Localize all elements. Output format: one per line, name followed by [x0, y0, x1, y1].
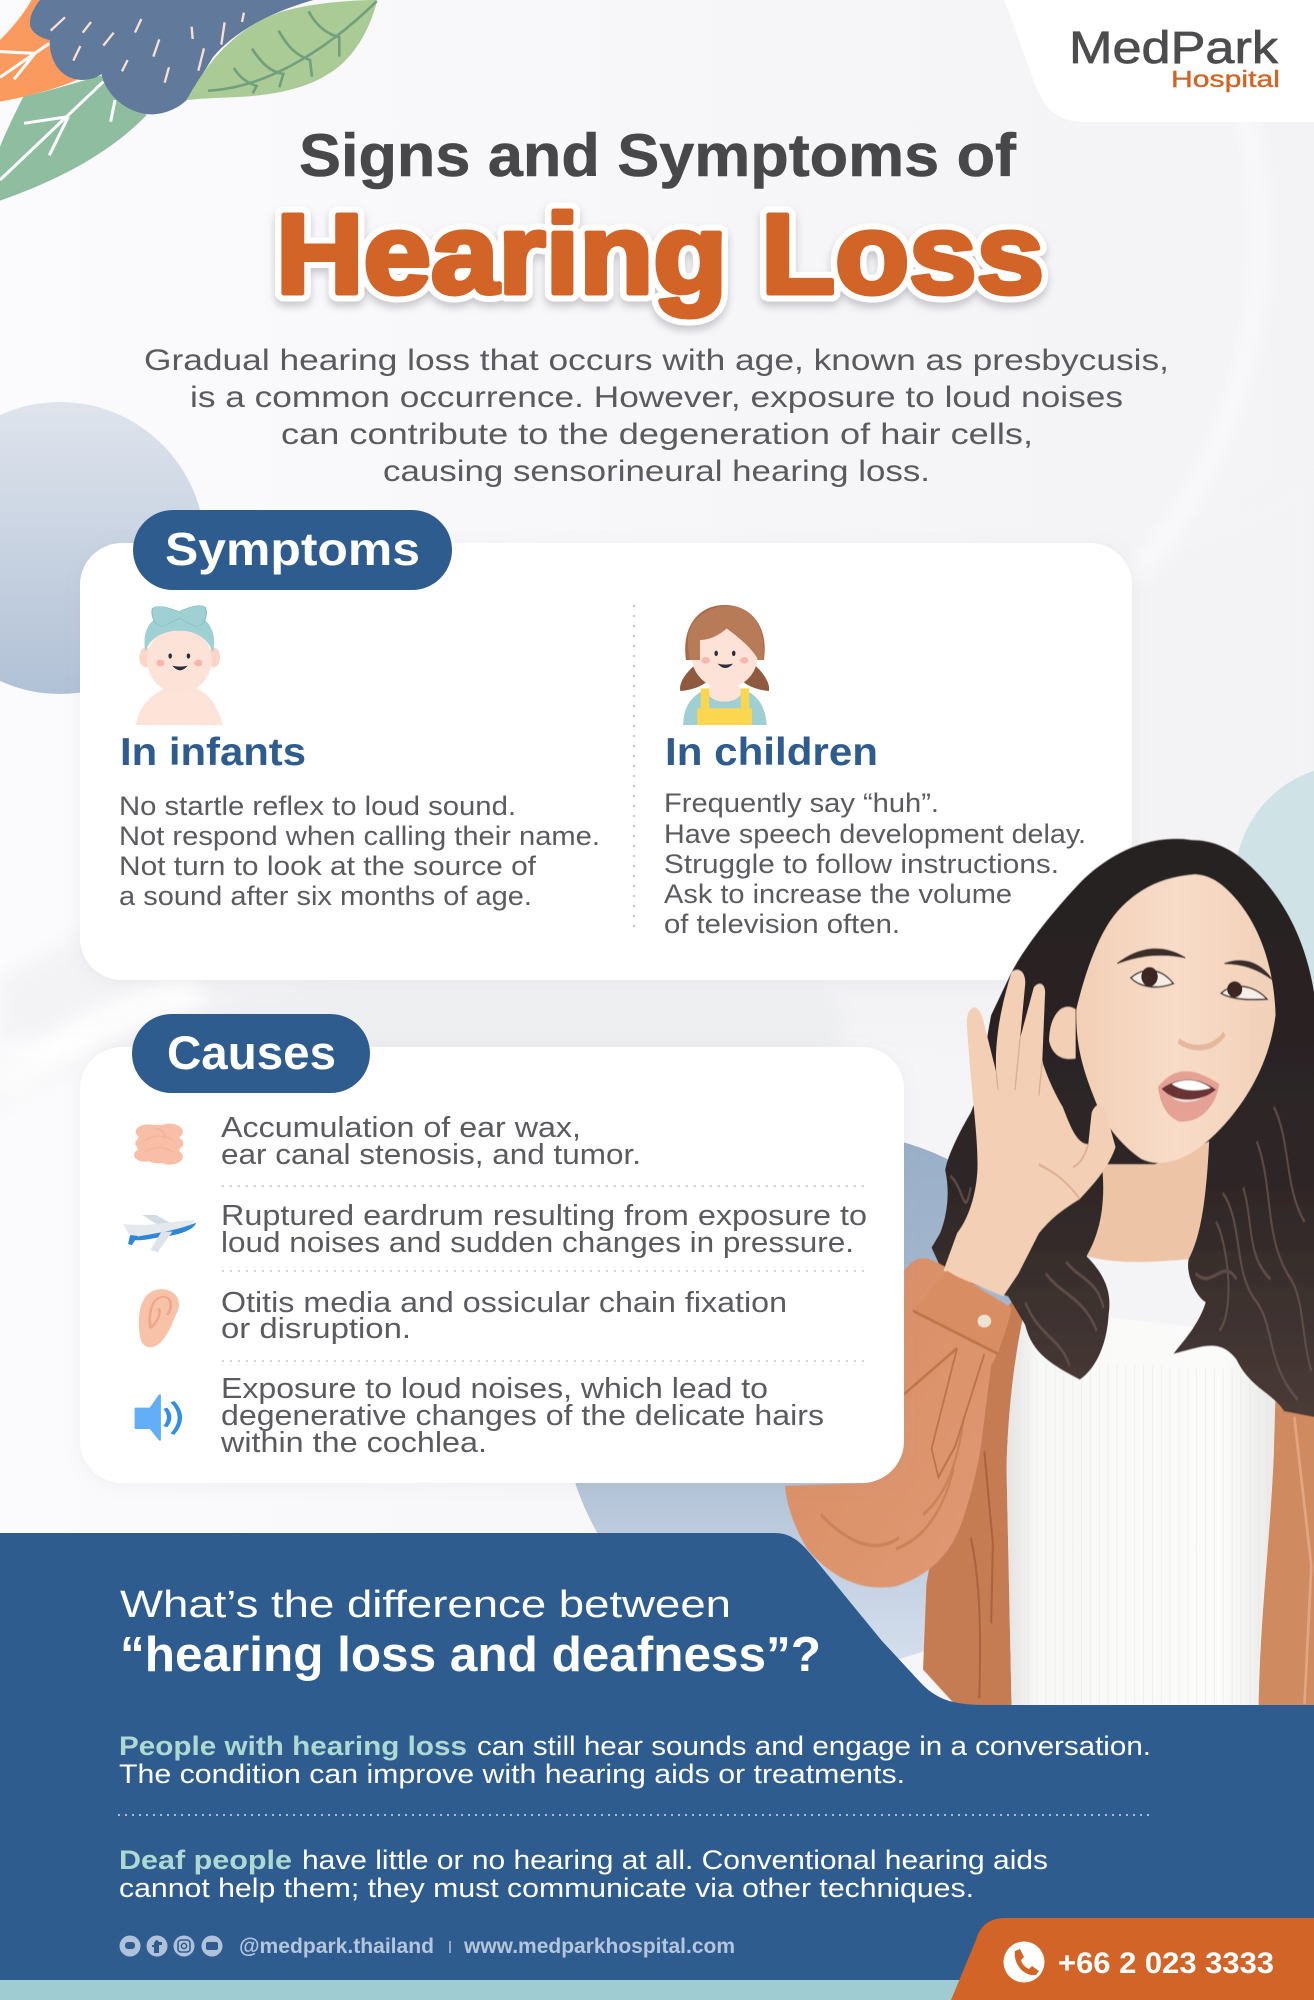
text: children list: of television often.: [664, 909, 900, 939]
text: cause 3: or disruption.: [221, 1313, 411, 1345]
pill: symptoms heading: Symptoms: [165, 523, 420, 575]
text: cause 3: Otitis media and ossicular chain fixation: [221, 1287, 787, 1319]
pill: causes heading: [132, 1014, 370, 1093]
blob: slate blue: [30, 0, 313, 114]
social icons: [120, 1936, 222, 1956]
text: cause 1: [221, 1112, 641, 1171]
text: people with hearing loss: can still hear sounds and engage in a conversation.: [477, 1731, 1151, 1761]
text: cause 4: [220, 1373, 824, 1459]
intro text: [144, 344, 1169, 488]
intro text: causing sensorineural hearing loss.: [383, 455, 930, 488]
text: cause 3: [221, 1287, 787, 1345]
leaf: orange: [0, 0, 77, 102]
phone box: [951, 1918, 1314, 2000]
text: people with hearing loss: [119, 1731, 1151, 1789]
text: infants list: a sound after six months of age.: [119, 881, 532, 911]
pill: causes heading: Causes: [167, 1026, 336, 1079]
intro text: can contribute to the degeneration of hair cells,: [281, 418, 1033, 451]
panel: hearing loss vs deafness: [0, 1533, 1314, 1980]
title line 1: Signs and Symptoms of: [299, 122, 1017, 189]
footer band: teal: [0, 1980, 1314, 2000]
text: children list: Struggle to follow instructions.: [664, 849, 1059, 879]
heading: difference question: What’s the difference between: [120, 1584, 731, 1626]
text: website: www.medparkhospital.com: [463, 1935, 735, 1958]
decorative circle: right teal: [1235, 765, 1314, 995]
blob dashes: [51, 13, 244, 83]
icon: child: [680, 605, 769, 725]
text: people with hearing loss: The condition can improve with hearing aids or treatments.: [119, 1759, 905, 1789]
icon: speaker: [136, 1395, 180, 1440]
intro text: is a common occurrence. However, exposure to loud noises: [190, 381, 1123, 414]
decorative circle: left blue: [0, 402, 205, 694]
icon: ear: [139, 1289, 179, 1347]
leaf: left green: [0, 75, 147, 201]
heading: in infants: In infants: [120, 731, 306, 774]
text: people with hearing loss: People with hearing loss: [119, 1731, 467, 1761]
icon: ear wax: [134, 1124, 183, 1165]
logo: Hospital: Hospital: [1171, 66, 1280, 92]
text: children list: Ask to increase the volume: [664, 879, 1012, 909]
leaf veins: white: [0, 43, 115, 180]
icon: phone: [1004, 1942, 1044, 1982]
heading: difference question: [120, 1584, 821, 1682]
text: infants list: No startle reflex to loud sound.: [119, 791, 516, 821]
pill: symptoms heading: [133, 510, 452, 590]
text: infants list: Not turn to look at the source of: [119, 851, 537, 881]
panel: symptoms: [80, 510, 1132, 980]
text: infants list: [119, 791, 600, 911]
intro text: Gradual hearing loss that occurs with age, known as presbycusis,: [144, 344, 1169, 377]
text: cause 2: Ruptured eardrum resulting from exposure to: [221, 1200, 867, 1232]
text: cause 2: loud noises and sudden changes in pressure.: [221, 1227, 854, 1259]
logo: MedPark: MedPark: [1069, 22, 1279, 73]
decorative circle: blue behind woman: [562, 1132, 1098, 1668]
text: cause 4: within the cochlea.: [220, 1427, 487, 1459]
text: deaf people: Deaf people: [119, 1845, 292, 1875]
text: cause 1: Accumulation of ear wax,: [221, 1112, 581, 1144]
text: children list: Have speech development delay.: [664, 819, 1086, 849]
title line 2 outline: Hearing Loss: [276, 191, 1044, 317]
text: cause 4: Exposure to loud noises, which lead to: [221, 1373, 768, 1405]
heading: difference question: “hearing loss and deafness”?: [120, 1628, 821, 1682]
leaves illustration: [0, 0, 377, 201]
title: [276, 122, 1044, 317]
text: cause 2: [221, 1200, 867, 1259]
photo: woman cupping ear: [785, 839, 1314, 1707]
text: phone number: +66 2 023 3333: [1058, 1947, 1274, 1980]
text: social handle: @medpark.thailand: [239, 1935, 434, 1958]
text: cause 4: degenerative changes of the delicate hairs: [221, 1400, 824, 1432]
text: cause 1: ear canal stenosis, and tumor.: [221, 1139, 641, 1171]
leaf veins: green: [208, 1, 377, 93]
icon: airplane: [123, 1215, 196, 1252]
text: deaf people: have little or no hearing at all. Conventional hearing aids: [302, 1845, 1048, 1875]
logo panel: [1004, 0, 1314, 122]
text: deaf people: cannot help them; they must communicate via other techniques.: [119, 1873, 974, 1903]
icon: baby: [136, 606, 223, 725]
panel: causes: [80, 1014, 904, 1483]
text: children list: [664, 788, 1086, 939]
text: deaf people: [119, 1845, 1048, 1903]
leaf: right green: [187, 0, 377, 100]
text: children list: Frequently say “huh”.: [664, 788, 939, 818]
title line 2: Hearing Loss: [276, 191, 1044, 317]
heading: in children: In children: [665, 731, 878, 774]
text: infants list: Not respond when calling their name.: [119, 821, 600, 851]
